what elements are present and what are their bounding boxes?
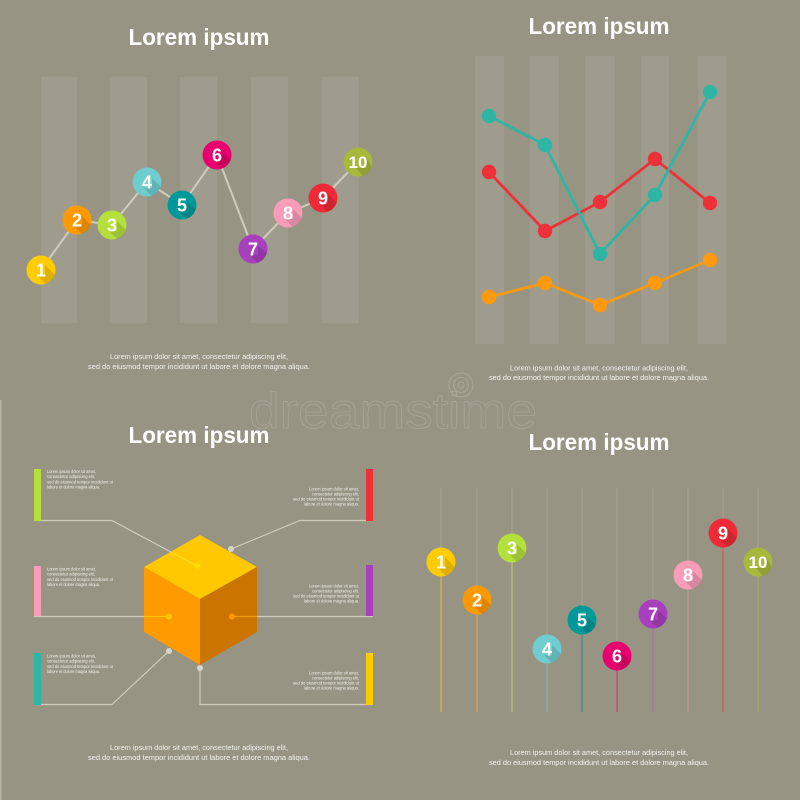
callout: right 2: consectetur adipiscing elit, [312, 588, 359, 594]
faint upper stems [441, 488, 758, 656]
leader lines [34, 520, 373, 704]
pin 1 [426, 548, 456, 576]
callout: left 1: labore et dolore magna aliqua. [47, 484, 100, 490]
pin 8: 8 [683, 566, 693, 586]
callout: right 3 [293, 653, 373, 705]
marker 10: 10 [349, 153, 367, 172]
pin 9: 9 [718, 524, 728, 544]
pin 2: 2 [472, 590, 482, 610]
marker 5: 5 [177, 196, 187, 216]
caption: bottom right: Lorem ipsum dolor sit amet, consectetur adipiscing elit, [510, 748, 688, 757]
pin 7: 7 [648, 604, 658, 624]
caption: bottom left [88, 743, 310, 762]
callout: right 2: Lorem ipsum dolor sit amet, [309, 584, 359, 588]
pin 1: 1 [436, 552, 446, 572]
callout: right 3: sed do eiusmod tempor incididunt ut [293, 680, 360, 686]
caption: bottom left: Lorem ipsum dolor sit amet, consectetur adipiscing elit, [110, 743, 288, 752]
callout: right 2: labore et dolore magna aliqua. [304, 598, 359, 604]
callout: right 3: consectetur adipiscing elit, [312, 676, 359, 680]
pin 6: 6 [612, 646, 622, 666]
marker 6 [202, 140, 232, 170]
marker 10 [344, 148, 372, 176]
title: bottom right: Lorem ipsum [528, 429, 670, 455]
marker 6: 6 [212, 146, 222, 166]
callout: right 1: consectetur adipiscing elit, [312, 492, 359, 496]
callout: right 3: Lorem ipsum dolor sit amet, [309, 670, 359, 676]
callout: right 2 [293, 565, 373, 616]
callout: left 3 [34, 653, 114, 705]
callout: right 1: Lorem ipsum dolor sit amet, [309, 486, 359, 492]
pin 7 [638, 600, 668, 628]
caption: top left: sed do eiusmod tempor incididunt ut labore et dolore magna aliqua. [88, 362, 310, 371]
marker 8: 8 [283, 204, 293, 224]
marker 1 [26, 256, 56, 284]
caption: top left [88, 352, 310, 371]
caption: top right: sed do eiusmod tempor incididunt ut labore et dolore magna aliqua. [489, 373, 709, 382]
callout: left 1: consectetur adipiscing elit, [47, 474, 95, 479]
marker 9 [308, 184, 338, 212]
marker 2: 2 [72, 210, 82, 230]
callout: left 3: sed do eiusmod tempor incididunt ut [47, 664, 114, 669]
title: top left: Lorem ipsum [128, 24, 270, 50]
leader dots [166, 546, 235, 671]
watermark: dreamstime [249, 383, 537, 439]
callout: right 2: sed do eiusmod tempor incididunt ut [293, 594, 360, 598]
callout: left 1 [34, 469, 114, 521]
series: red [482, 152, 717, 238]
panel: multi-series line chart [475, 13, 726, 382]
marker 1: 1 [36, 260, 46, 280]
panel: lollipop chart [426, 429, 772, 767]
series: teal [482, 85, 717, 261]
panel: numbered line chart [26, 24, 372, 371]
callout: left 1: Lorem ipsum dolor sit amet, [47, 469, 96, 474]
pin 5 [568, 606, 596, 634]
pin 4 [532, 634, 562, 664]
caption: top right [489, 364, 709, 382]
callout: right 1: labore et dolore magna aliqua. [304, 502, 359, 506]
background columns: top right [475, 56, 726, 344]
pin 3 [498, 534, 526, 562]
callout: right 1 [293, 469, 373, 521]
pin 8 [674, 560, 702, 590]
pin 4: 4 [542, 640, 552, 660]
callout: left 3: consectetur adipiscing elit, [47, 658, 95, 664]
pin 9 [708, 518, 738, 548]
caption: bottom left: sed do eiusmod tempor incididunt ut labore et dolore magna aliqua. [88, 753, 310, 762]
marker 4: 4 [142, 172, 152, 192]
marker 3: 3 [107, 216, 117, 236]
callout: left 2: labore et dolore magna aliqua. [47, 582, 100, 587]
caption: bottom right [489, 748, 709, 767]
marker 3 [98, 210, 126, 240]
series: orange [482, 253, 717, 312]
pin 10: 10 [749, 553, 767, 572]
callout: left 2 [34, 566, 114, 616]
callout: left 2: consectetur adipiscing elit, [47, 572, 95, 576]
pin 10 [744, 548, 772, 576]
pin 6 [602, 642, 632, 670]
marker 7 [238, 234, 268, 264]
marker 8 [274, 198, 302, 228]
callout: right 3: labore et dolore magna aliqua. [304, 686, 359, 690]
background columns: top left [41, 77, 359, 323]
caption: top left: Lorem ipsum dolor sit amet, consectetur adipiscing elit, [110, 352, 288, 361]
coloured lower stems [441, 533, 758, 712]
pin 5: 5 [577, 610, 587, 630]
marker 2 [62, 206, 92, 234]
title: top right: Lorem ipsum [528, 13, 670, 39]
title: bottom left: Lorem ipsum [128, 422, 270, 448]
marker 4 [132, 168, 162, 196]
pin 3: 3 [507, 538, 517, 558]
callout: right 1: sed do eiusmod tempor incididunt ut [293, 496, 360, 502]
connecting line [41, 155, 358, 270]
callout: left 3: labore et dolore magna aliqua. [47, 669, 100, 674]
callout: left 1: sed do eiusmod tempor incididunt ut [47, 480, 114, 484]
callout: left 2: sed do eiusmod tempor incididunt ut [47, 577, 114, 582]
pin 2 [462, 586, 492, 614]
marker 7: 7 [248, 240, 258, 260]
marker 9: 9 [318, 188, 328, 208]
marker 5 [168, 190, 196, 220]
callout: left 3: Lorem ipsum dolor sit amet, [47, 654, 96, 658]
caption: bottom right: sed do eiusmod tempor incididunt ut labore et dolore magna aliqua. [489, 758, 709, 767]
panel: cube diagram [34, 422, 373, 762]
callout: left 2: Lorem ipsum dolor sit amet, [47, 566, 96, 572]
cube [144, 535, 257, 665]
caption: top right: Lorem ipsum dolor sit amet, consectetur adipiscing elit, [510, 364, 688, 372]
